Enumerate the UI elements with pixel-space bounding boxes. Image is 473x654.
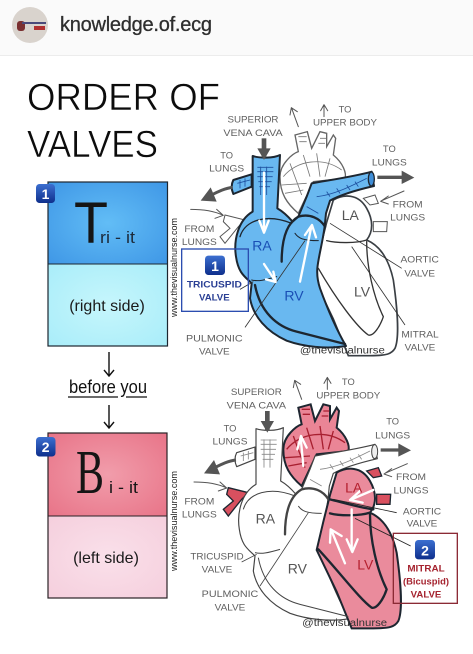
pointer lines	[333, 499, 411, 546]
pulmonary artery opening	[368, 172, 374, 186]
white flow arrows	[259, 173, 316, 282]
anatomy labels: FROM	[184, 497, 214, 507]
icon: badge 2	[36, 437, 56, 456]
anatomy labels: TO	[339, 104, 351, 114]
aorta	[280, 132, 345, 213]
anatomy labels: VENA CAVA	[223, 128, 284, 138]
right heart white	[235, 428, 377, 620]
chamber labels: RV	[284, 288, 304, 304]
anatomy labels: FROM	[396, 472, 426, 482]
text: right side: (right side)	[69, 298, 145, 315]
mnemonic: T ri - it: ri - it	[100, 228, 135, 247]
anatomy labels: LUNGS	[375, 430, 410, 440]
anatomy labels: LUNGS	[372, 158, 407, 168]
icon: badge 1	[36, 184, 55, 203]
anatomy labels: TRICUSPID	[190, 551, 244, 561]
aorta hatching	[285, 409, 345, 468]
anatomy labels: LUNGS	[209, 164, 244, 174]
panel: Bi-it left side	[48, 433, 167, 598]
mnemonic: T ri - it	[74, 191, 135, 256]
grey hatching	[241, 439, 370, 486]
chamber labels	[256, 480, 374, 576]
account name: knowledge.of.ecg	[60, 14, 212, 36]
aorta	[283, 404, 349, 486]
anatomy labels: MITRAL	[401, 330, 439, 340]
anatomy labels: AORTIC	[403, 506, 441, 516]
header bar	[0, 0, 473, 56]
text: left side: (left side)	[73, 550, 139, 567]
icon: badge 1: 1	[42, 186, 50, 202]
chamber labels: RA	[252, 238, 272, 254]
website credit top: www.thevisualnurse.com	[169, 218, 179, 318]
callout: tricuspid valve: TRICUSPID	[187, 279, 242, 289]
anatomy labels: VALVE	[202, 565, 232, 575]
arrow: down to Bi-it	[104, 405, 114, 428]
callout: mitral valve: (Bicuspid)	[403, 576, 449, 586]
icon: badge 2: 2	[42, 439, 50, 455]
mnemonic: B i - it	[76, 439, 138, 507]
callout: mitral valve: MITRAL	[407, 564, 445, 574]
anatomy labels: AORTIC	[400, 255, 439, 265]
callout: tricuspid valve	[182, 249, 248, 311]
inner heart walls	[240, 216, 383, 344]
diagram: heart, right side highlighted	[182, 104, 439, 357]
anatomy labels: LUNGS	[182, 510, 217, 520]
pulmonary artery opening	[372, 445, 378, 459]
callout: tricuspid valve: 1	[211, 258, 219, 274]
right heart blood	[232, 155, 374, 347]
inner heart walls	[243, 488, 387, 617]
chamber labels: LA	[345, 480, 363, 496]
anatomy labels: PULMONIC	[186, 333, 243, 343]
diagram: heart, left side highlighted	[182, 377, 457, 629]
watermark: @thevisualnurse	[300, 345, 385, 356]
pointer lines	[240, 223, 405, 327]
white flow arrows	[297, 436, 373, 563]
website credit bottom: www.thevisualnurse.com	[169, 471, 179, 572]
anatomy labels: VALVE	[404, 268, 435, 278]
anatomy labels: TO	[342, 377, 355, 387]
anatomy labels: VALVE	[405, 343, 435, 353]
text: before you: before you	[69, 377, 147, 397]
chamber labels: RV	[288, 560, 308, 576]
title	[27, 77, 220, 166]
anatomy labels: UPPER BODY	[313, 118, 378, 128]
blue hatching	[237, 167, 367, 213]
dark flow arrows	[194, 377, 411, 491]
chamber labels: LA	[342, 207, 360, 223]
anatomy labels: SUPERIOR	[227, 114, 279, 124]
watermark: @thevisualnurse	[302, 618, 388, 629]
anatomy labels: FROM	[393, 199, 423, 209]
chamber labels: RA	[256, 510, 276, 526]
anatomy labels: TO	[220, 151, 233, 161]
anatomy labels: FROM	[184, 224, 214, 234]
chamber labels: LV	[354, 284, 371, 300]
mnemonic: B i - it: B	[76, 439, 104, 507]
pulmonary vein stubs	[223, 468, 391, 516]
anatomy labels: LUNGS	[212, 436, 247, 446]
left heart chambers	[313, 196, 398, 356]
callout: mitral valve	[393, 533, 457, 603]
anatomy labels: VALVE	[215, 602, 245, 612]
anatomy labels: TO	[383, 144, 396, 154]
arrow: down to before you	[104, 352, 114, 376]
mnemonic: B i - it: i - it	[109, 478, 138, 497]
title: VALVES	[27, 124, 158, 166]
anatomy labels: SUPERIOR	[231, 387, 282, 397]
anatomy labels	[182, 104, 439, 357]
pulmonary vein stubs	[220, 195, 387, 243]
anatomy labels: VALVE	[407, 519, 437, 529]
title: ORDER OF	[27, 77, 220, 119]
anatomy labels: LUNGS	[182, 237, 217, 247]
anatomy labels	[182, 377, 441, 612]
dark flow arrows	[191, 105, 414, 218]
anatomy labels: TO	[224, 423, 236, 433]
anatomy labels: UPPER BODY	[316, 390, 381, 400]
mnemonic: T ri - it: T	[74, 191, 108, 256]
anatomy labels: VALVE	[199, 347, 230, 357]
callout: mitral valve: VALVE	[411, 590, 441, 600]
callout: tricuspid valve: VALVE	[199, 292, 230, 302]
anatomy labels: LUNGS	[390, 213, 425, 223]
aorta hatching	[282, 137, 342, 195]
icon: account avatar	[12, 7, 48, 43]
callout: mitral valve: 2	[421, 542, 429, 558]
anatomy labels: VENA CAVA	[227, 401, 287, 411]
anatomy labels: LUNGS	[393, 485, 428, 495]
left heart chambers	[317, 469, 401, 628]
anatomy labels: PULMONIC	[202, 589, 259, 599]
chamber labels	[252, 207, 371, 304]
chamber labels: LV	[357, 556, 374, 572]
anatomy labels: TO	[386, 417, 399, 427]
panel: Tri-it right side	[48, 182, 168, 346]
